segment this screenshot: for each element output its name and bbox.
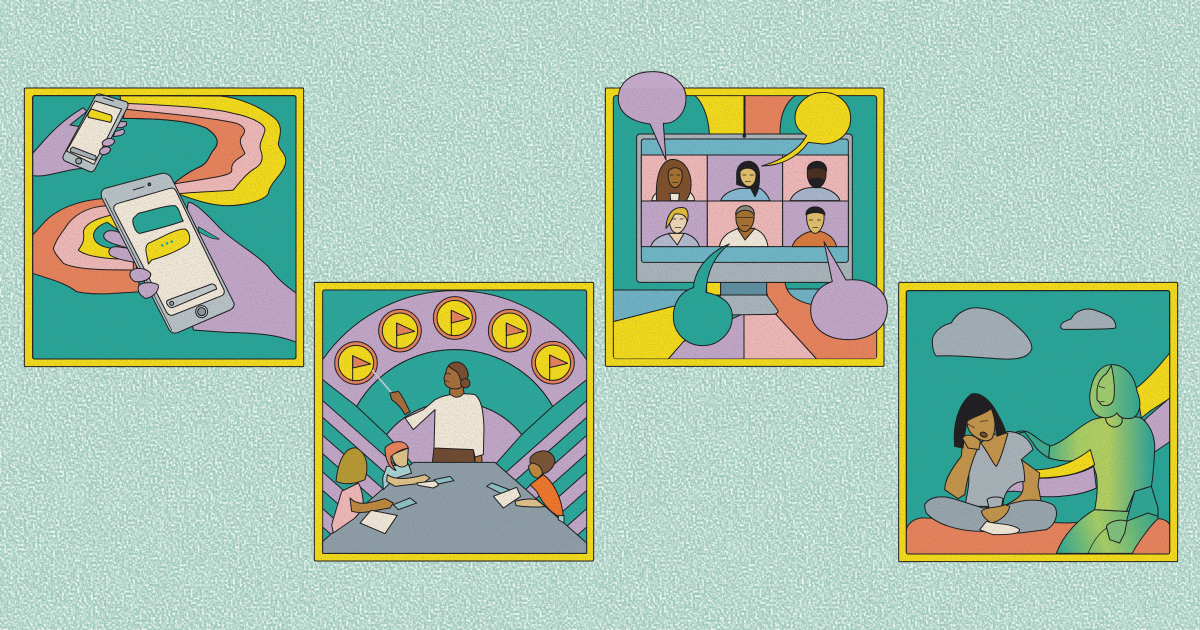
speech bubble: bottom right purple [811,242,887,340]
friend legs [1056,508,1158,553]
woman's legs [925,497,1056,533]
purple arch [323,291,587,406]
big hand [180,202,297,342]
boy [515,451,564,523]
girl with red hair [383,442,430,490]
panel frame [24,88,304,367]
ribbons [33,96,297,342]
friend hand on knee [1106,520,1127,543]
friend face [1097,365,1115,406]
flag medallions [335,297,574,384]
video tile: bearded man [790,161,840,201]
friend hair [1090,365,1140,419]
panel frame [605,88,884,366]
front ribbons [992,450,1096,497]
video tile: blonde person [651,208,699,247]
panel teal ground [323,290,587,553]
print grain overlays [24,88,1178,562]
friend neck [1106,413,1122,427]
speech bubble: top left purple [618,72,686,160]
panel: phones connected by rainbow ribbon [24,88,304,367]
friend forearm [1126,486,1158,521]
panel frame [899,282,1178,562]
diagonal stripes left [322,400,396,534]
mat [906,518,1170,555]
video tile: woman with black hair [721,161,770,201]
teal message bubble [133,206,183,233]
video tile: man with glasses [719,206,768,247]
panel: teacher and children around table [314,282,594,575]
panel edge redraw [33,96,296,359]
monitor [637,134,852,282]
yellow typing bubble [146,229,190,264]
video tile: woman with long brown hair [652,159,695,201]
back ribbons [1136,352,1170,452]
panel teal ground [33,96,296,359]
cloud large [932,308,1032,359]
big phone [101,173,234,333]
video tile: man in orange shirt [792,207,837,247]
friend with green gradient [1014,365,1158,553]
girl with blonde hair [332,448,393,533]
woman's face [967,409,995,441]
monitor stand [713,282,778,315]
panel: video call monitor with speech bubbles [605,72,887,366]
small hand [33,108,87,176]
friend hand on shoulder [1014,431,1050,458]
inner purple dome [387,402,522,465]
teacher [373,362,484,463]
speech bubble: bottom teal [673,244,732,346]
panel frame [314,282,594,561]
speech bubble: top right yellow [762,92,851,166]
seated woman [925,394,1056,535]
phone and hands [987,497,1003,510]
woman's hair [954,394,1006,448]
background colour blocks [613,96,877,359]
cloud small [1061,309,1116,329]
friend torso and arm [1049,416,1155,511]
table papers and tablets [360,476,521,534]
panel teal ground [906,291,1170,554]
panel: friend comforting seated woman [899,282,1178,562]
table [323,462,587,553]
panel teal ground [613,96,877,359]
small phone [63,94,128,172]
inner teal arch [357,350,553,435]
sock [980,521,1020,535]
diagonal stripes right [506,400,587,535]
